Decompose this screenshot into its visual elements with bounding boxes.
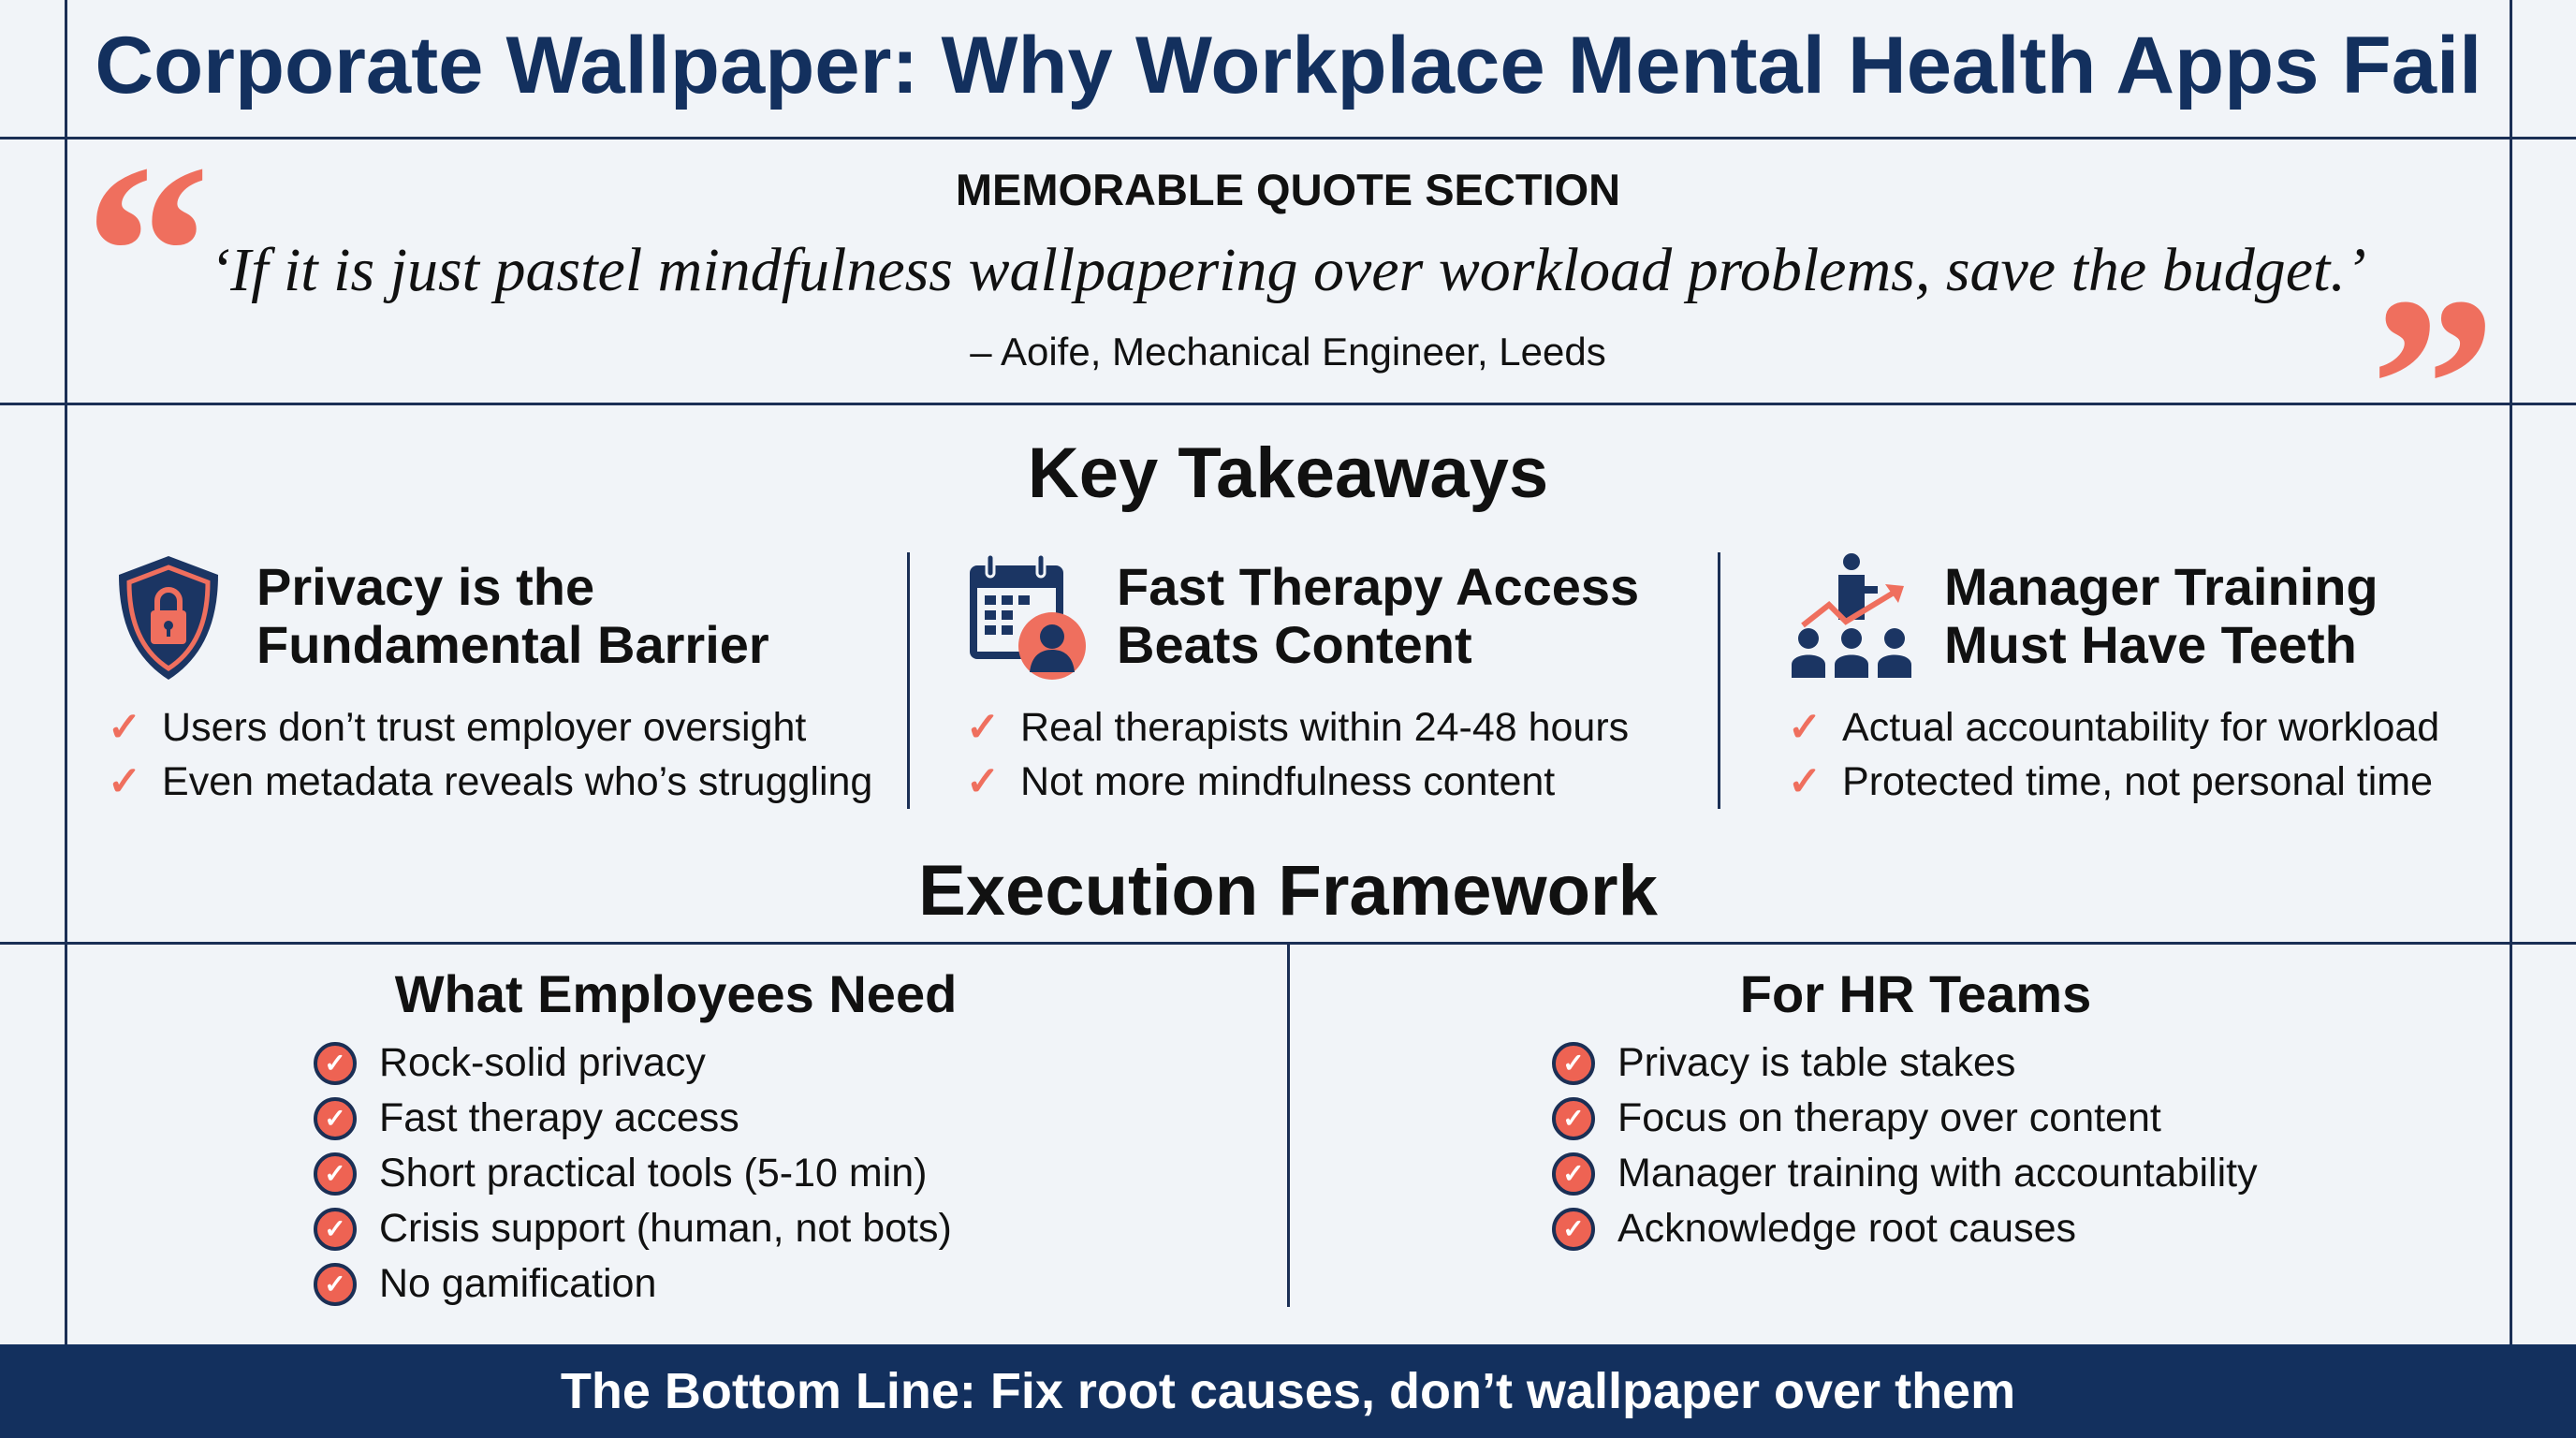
panel: manager (1788, 553, 2439, 804)
checklist: Focus on therapy over content (1617, 1095, 2161, 1140)
checklist: ✓ (324, 1269, 346, 1298)
heading: execution framework: Execution Framework (918, 851, 1658, 931)
icon: close quote: ” (2370, 245, 2496, 525)
checklist: ✓ (324, 1103, 346, 1133)
heading: Manager Training (1944, 557, 2378, 616)
heading: Privacy is the (256, 557, 594, 616)
checklist: Manager training with accountability (1617, 1151, 2258, 1196)
title: Corporate Wallpaper: Why Workplace Mental Health Apps Fail (95, 21, 2481, 110)
icon: calendar with therapist (970, 556, 1086, 680)
quote text: ‘If it is just pastel mindfulness wallpapering over workload problems, save the budget.’ (210, 236, 2366, 304)
checklist: ✓ (324, 1213, 346, 1243)
bullets (1788, 705, 2439, 804)
heading: What Employees Need (395, 964, 957, 1023)
checklist: Short practical tools (5-10 min) (379, 1151, 927, 1196)
bottom line banner (0, 1344, 2576, 1438)
checklist: ✓ (1562, 1103, 1585, 1133)
checklist: ✓ (1562, 1159, 1585, 1187)
heading (1117, 557, 1639, 674)
heading: Must Have Teeth (1944, 615, 2357, 674)
heading (256, 557, 769, 674)
attribution: – Aoife, Mechanical Engineer, Leeds (970, 330, 1606, 374)
checklist: No gamification (379, 1261, 656, 1306)
bullets: ✓ Users don’t trust employer oversight (108, 705, 806, 750)
panel: what employees need (314, 964, 957, 1306)
bullets: ✓ Real therapists within 24-48 hours (966, 705, 1629, 750)
bullets: ✓ Even metadata reveals who’s struggling (108, 759, 872, 804)
checklist: Rock-solid privacy (379, 1040, 706, 1085)
icon: shield (119, 556, 218, 680)
heading (1944, 557, 2378, 674)
heading: Beats Content (1117, 615, 1472, 674)
checklist (1552, 1040, 2258, 1251)
heading: Fast Therapy Access (1117, 557, 1639, 616)
heading: For HR Teams (1740, 964, 2091, 1023)
heading: key takeaways: Key Takeaways (1028, 433, 1548, 513)
bottom line banner: The Bottom Line: Fix root causes, don’t wallpaper over them (561, 1363, 2015, 1419)
panel: therapy (966, 556, 1639, 804)
bullets (966, 705, 1629, 804)
checklist: ✓ (1562, 1049, 1585, 1077)
bullets: ✓ Not more mindfulness content (966, 759, 1555, 804)
panel: quote (84, 112, 2496, 525)
checklist: Privacy is table stakes (1617, 1040, 2015, 1085)
checklist: ✓ (324, 1049, 346, 1077)
checklist: Acknowledge root causes (1617, 1206, 2076, 1251)
bullets: ✓ Protected time, not personal time (1788, 759, 2433, 804)
panel: for HR teams (1552, 964, 2258, 1251)
icon: manager with team (1792, 553, 1911, 678)
panel: privacy (108, 556, 872, 804)
checklist: Fast therapy access (379, 1095, 739, 1140)
checklist: ✓ (324, 1159, 346, 1187)
bullets (108, 705, 872, 804)
checklist (314, 1040, 952, 1306)
quote heading: MEMORABLE QUOTE SECTION (956, 165, 1620, 214)
checklist: Crisis support (human, not bots) (379, 1206, 952, 1251)
heading: Fundamental Barrier (256, 615, 769, 674)
icon: open quote: “ (84, 112, 211, 392)
checklist: ✓ (1562, 1213, 1585, 1243)
bullets: ✓ Actual accountability for workload (1788, 705, 2439, 750)
